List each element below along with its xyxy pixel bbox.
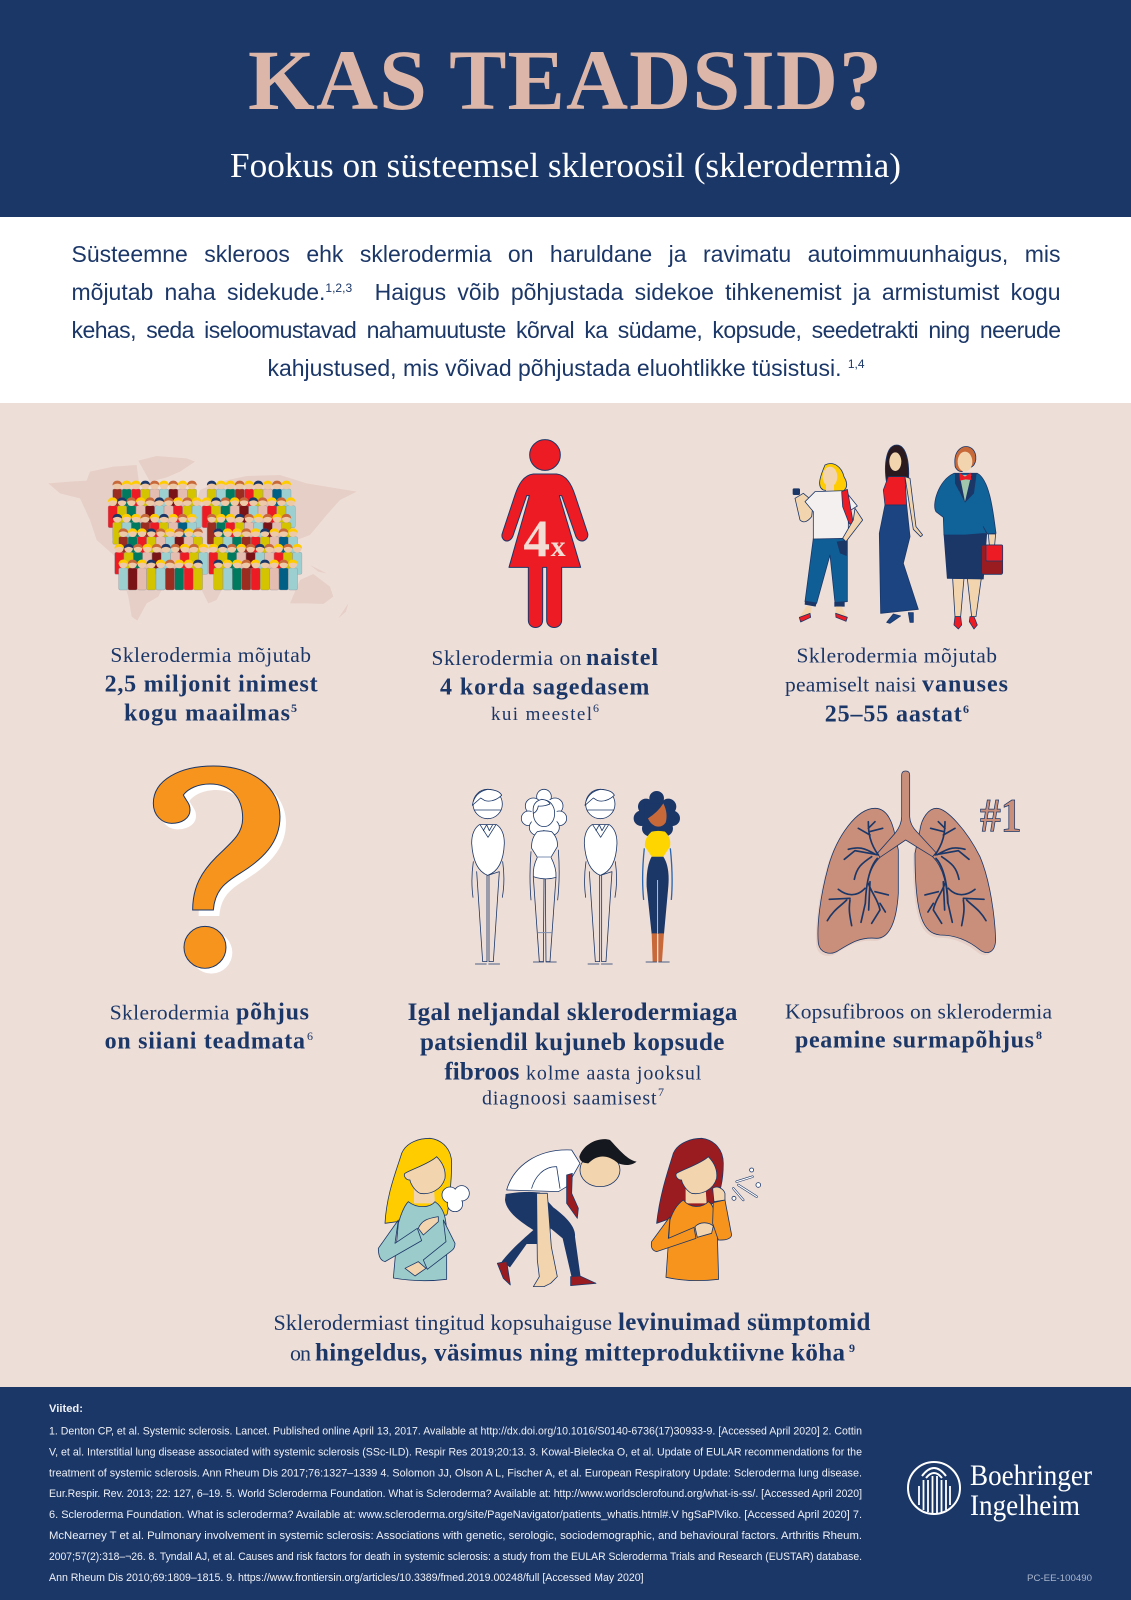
world map	[48, 456, 357, 621]
icon: lungs with number one	[816, 771, 1022, 956]
references: Ann Rheum Dis 2010;69:1809–1815. 9. https://www.frontiersin.org/articles/10.3389/fmed.2019.00248/full [Accessed May 2020]	[49, 1572, 644, 1584]
footer band	[0, 1387, 1131, 1600]
text: 2.5 million: kogu maailmas	[124, 701, 290, 727]
text: leading cause of death: Kopsufibroos on sklerodermia	[785, 999, 1052, 1023]
icon: question mark	[153, 766, 286, 974]
text: women aged 25-55: 25–55 aastat	[825, 702, 962, 728]
text: cause unknown: 6	[307, 1029, 313, 1043]
document code: PC-EE-100490	[1027, 1573, 1092, 1584]
references: Eur.Respir. Rev. 2013; 22: 127, 6–19. 5. World Scleroderma Foundation. What is Scleroderma? Available at: http://www.worldsclerofound.org/what-is-ss/. [Accessed April 2020]	[49, 1488, 862, 1500]
tired man	[497, 1139, 637, 1287]
text: one in four: kolme aasta jooksul	[526, 1062, 702, 1084]
coloured woman	[634, 791, 680, 963]
text: common symptoms: levinuimad sümptomid	[618, 1309, 870, 1336]
text: common symptoms: 9	[849, 1341, 855, 1355]
references: Viited:	[49, 1403, 83, 1415]
outlined man	[472, 789, 504, 964]
logo: Boehringer Ingelheim: Ingelheim	[970, 1489, 1080, 1522]
text: women aged 25-55: peamiselt naisi	[785, 673, 916, 697]
text: 4 times more common: 4 korda sagedasem	[440, 674, 649, 700]
text: 4 times more common: Sklerodermia on	[432, 646, 582, 670]
text: cause unknown: põhjus	[236, 999, 309, 1025]
references	[49, 1403, 862, 1584]
text: women aged 25-55: Sklerodermia mõjutab	[796, 643, 997, 667]
references: treatment of systemic sclerosis. Ann Rheum Dis 2017;76:1327–1339 4. Solomon JJ, Olson A L, Fischer A, et al. European Respiratory Update: Scleroderma lung disease.	[49, 1468, 862, 1480]
outlined woman	[521, 789, 567, 962]
intro paragraph: kahjustused, mis võivad põhjustada eluohtlikke tüsistusi. 1,4	[267, 355, 865, 381]
text: 2.5 million	[105, 643, 318, 727]
lungs	[816, 771, 996, 956]
woman with backpack	[793, 464, 863, 622]
header band	[0, 0, 1131, 217]
text: 4 times more common: 6	[593, 701, 599, 715]
text: cause unknown: Sklerodermia	[110, 1000, 230, 1024]
icon: four figures, one in colour	[472, 789, 680, 964]
icon: world map with crowd	[48, 456, 357, 621]
text: one in four	[408, 999, 738, 1109]
text: one in four: 7	[658, 1085, 664, 1099]
title: KAS TEADSID?	[248, 32, 882, 128]
woman in long skirt	[879, 445, 923, 623]
logo: Boehringer Ingelheim	[908, 1459, 1092, 1522]
crowd	[108, 481, 302, 590]
text: women aged 25-55: 6	[963, 702, 969, 716]
references: 1. Denton CP, et al. Systemic sclerosis. Lancet. Published online April 13, 2017. Available at http://dx.doi.org/10.1016/S0140-6736(17)30933-9. [Accessed April 2020] 2. Cottin	[49, 1426, 862, 1438]
text: 2.5 million: 5	[291, 701, 297, 715]
references: 2007;57(2):318–¬26. 8. Tyndall AJ, et al. Causes and risk factors for death in systemic sclerosis: a study from the EULAR Scleroderma Trials and Research (EUSTAR) database.	[49, 1551, 862, 1563]
intro paragraph: mõjutab naha sidekude.1,2,3 Haigus võib põhjustada sidekoe tihkenemist ja armistumist kogu	[72, 279, 1060, 305]
woman with briefcase	[935, 446, 1003, 629]
intro paragraph: kehas, seda iseloomustavad nahamuutuste kõrval ka südame, kopsude, seedetrakti ning neerude	[72, 317, 1060, 343]
icon: three women	[793, 445, 1003, 629]
intro paragraph	[72, 241, 1060, 381]
text: leading cause of death: peamine surmapõhjus	[795, 1027, 1034, 1053]
subtitle: Fookus on süsteemsel skleroosil (sklerodermia)	[230, 146, 901, 185]
text: cause unknown: on siiani teadmata	[105, 1028, 305, 1054]
intro background	[0, 217, 1131, 403]
outlined man	[584, 789, 617, 964]
text: common symptoms: Sklerodermiast tingitud kopsuhaiguse	[274, 1310, 612, 1335]
breathless woman	[378, 1138, 469, 1281]
intro paragraph: Süsteemne skleroos ehk sklerodermia on haruldane ja ravimatu autoimmuunhaigus, mis	[72, 241, 1060, 267]
text: women aged 25-55	[785, 643, 1008, 728]
text: women aged 25-55: vanuses	[922, 672, 1008, 698]
text: one in four: diagnoosi saamisest	[482, 1087, 657, 1109]
icon: woman 4x: x	[551, 530, 566, 563]
text: one in four: patsiendil kujuneb kopsude	[420, 1029, 724, 1056]
logo: Boehringer Ingelheim: Boehringer	[970, 1459, 1092, 1492]
text: leading cause of death	[785, 999, 1052, 1053]
icon: woman 4x	[502, 440, 588, 627]
coughing woman	[651, 1138, 761, 1281]
references: V, et al. Interstitial lung disease associated with systemic sclerosis (SSc-ILD). Respir Res 2019;20:13. 3. Kowal-Bielecka O, et al. Update of EULAR recommendations for the	[49, 1446, 862, 1458]
text: common symptoms: on	[290, 1341, 311, 1366]
text: common symptoms	[274, 1309, 870, 1367]
icon: three symptoms	[378, 1138, 761, 1287]
text: 4 times more common	[432, 645, 658, 725]
icon: woman 4x: 4	[523, 509, 550, 569]
text: cause unknown	[105, 999, 313, 1054]
text: 2.5 million: Sklerodermia mõjutab	[110, 643, 311, 667]
text: 4 times more common: kui meestel	[491, 704, 592, 725]
text: common symptoms: hingeldus, väsimus ning mitteproduktiivne köha	[315, 1340, 846, 1367]
references: 6. Scleroderma Foundation. What is scleroderma? Available at: www.scleroderma.org/site/PageNavigator/patients_whatis.html#.V hgSaPlViko. [Accessed April 2020] 7.	[49, 1509, 862, 1521]
text: one in four: Igal neljandal sklerodermiaga	[408, 999, 738, 1026]
text: leading cause of death: 8	[1036, 1028, 1042, 1042]
logo mark	[908, 1462, 960, 1514]
main panel background	[0, 403, 1131, 1387]
text: 4 times more common: naistel	[586, 645, 658, 671]
text: one in four: fibroos	[444, 1058, 520, 1085]
text: 2.5 million: 2,5 miljonit inimest	[105, 672, 318, 698]
number one: #1	[980, 789, 1022, 842]
references: McNearney T et al. Pulmonary involvement in systemic sclerosis: Associations with genetic, serologic, sociodemographic, and behavioural factors. Arthritis Rheum.	[49, 1530, 862, 1542]
